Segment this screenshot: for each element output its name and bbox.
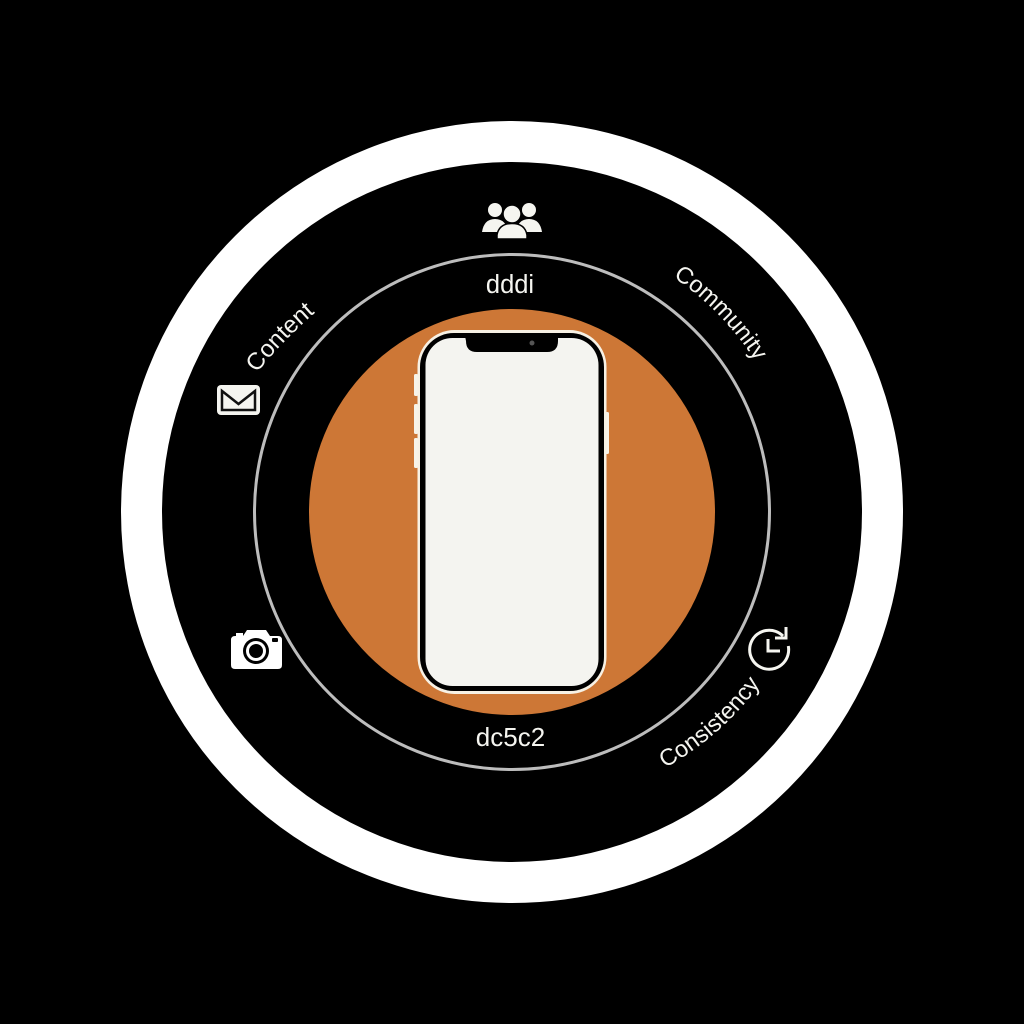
label: Community: Community [676,267,766,358]
icon: envelope [217,385,260,415]
label: Content: Content [248,302,315,370]
phone outer edge [418,330,606,694]
phone side buttons [414,374,609,468]
label: Consistency: Consistency [660,676,760,765]
phone screen [426,338,598,686]
phone notch [465,336,558,352]
icon: camera [231,630,282,669]
icon: clock with arrow [750,627,789,669]
label: dc5c2: dc5c2 [476,722,545,752]
orange center circle [309,309,715,715]
phone black frame [420,333,604,691]
label: dddi: dddi [486,271,534,299]
phone camera dot [530,340,534,346]
thin grey ring [254,254,770,770]
phone [414,330,609,694]
icon: community people [482,203,542,239]
outer white ring [142,142,882,882]
